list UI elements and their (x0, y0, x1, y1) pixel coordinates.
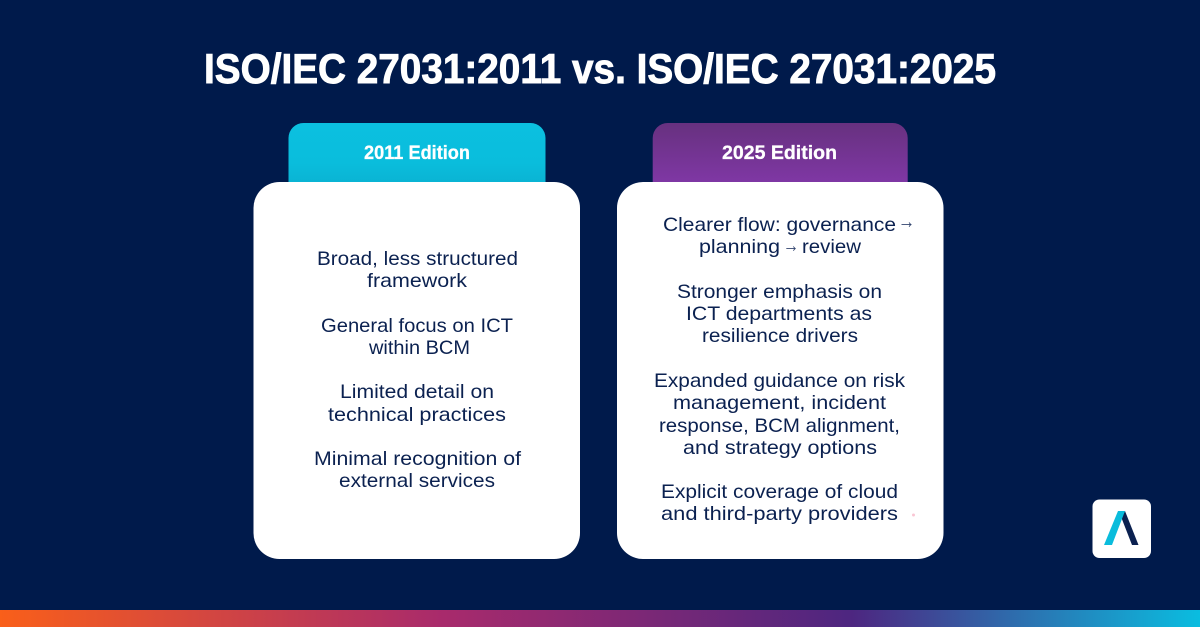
text: explicit coverage: Explicit coverage of cloud (661, 481, 898, 503)
panel: 2011 edition (254, 123, 580, 559)
text: expanded guidance: Expanded guidance on risk (654, 370, 905, 392)
text: clearer flow (663, 211, 915, 258)
card: 2011 edition white background (254, 182, 580, 559)
text: limited detail: Limited detail on (340, 381, 494, 403)
text: stronger emphasis: ICT departments as (686, 303, 872, 325)
text: broad framework: Broad, less structured (317, 248, 518, 270)
text: general focus: General focus on ICT (321, 315, 513, 337)
text: limited detail (328, 381, 506, 426)
tab: 2011 edition header: 2011 Edition (364, 143, 470, 164)
tab: 2025 edition header: 2025 Edition (722, 143, 837, 164)
text: expanded guidance: and strategy options (683, 437, 877, 459)
text: expanded guidance: management, incident (673, 392, 887, 414)
text: minimal recognition: external services (339, 470, 495, 492)
text: clearer flow: planning (699, 236, 780, 258)
card: 2025 edition white background (617, 182, 944, 559)
tab: 2025 edition header (653, 123, 908, 190)
panel: 2025 edition (617, 123, 944, 559)
text: stronger emphasis: resilience drivers (702, 325, 858, 347)
text: general focus (321, 315, 513, 359)
text: limited detail: technical practices (328, 404, 506, 426)
text: broad framework (317, 248, 518, 292)
text: broad framework: framework (367, 270, 467, 292)
footer gradient bar (0, 610, 1200, 627)
text: clearer flow: Clearer flow: governance (663, 214, 896, 236)
text: expanded guidance (654, 370, 905, 459)
tab: 2011 edition header (288, 123, 546, 190)
text: clearer flow: review (802, 236, 862, 258)
text: minimal recognition (314, 448, 522, 492)
icon: logo badge (1092, 500, 1151, 558)
text: expanded guidance: response, BCM alignment, (659, 415, 900, 437)
text: explicit coverage: and third-party providers (661, 503, 898, 525)
text: stronger emphasis: Stronger emphasis on (677, 281, 882, 303)
text: clearer flow: → (783, 235, 799, 257)
text: explicit coverage (661, 481, 898, 525)
title: ISO/IEC 27031:2011 vs. ISO/IEC 27031:2025 (204, 45, 996, 92)
text: minimal recognition: Minimal recognition of (314, 448, 522, 470)
text: stronger emphasis (677, 281, 882, 347)
text: general focus: within BCM (368, 337, 470, 359)
text: clearer flow: → (898, 211, 915, 233)
